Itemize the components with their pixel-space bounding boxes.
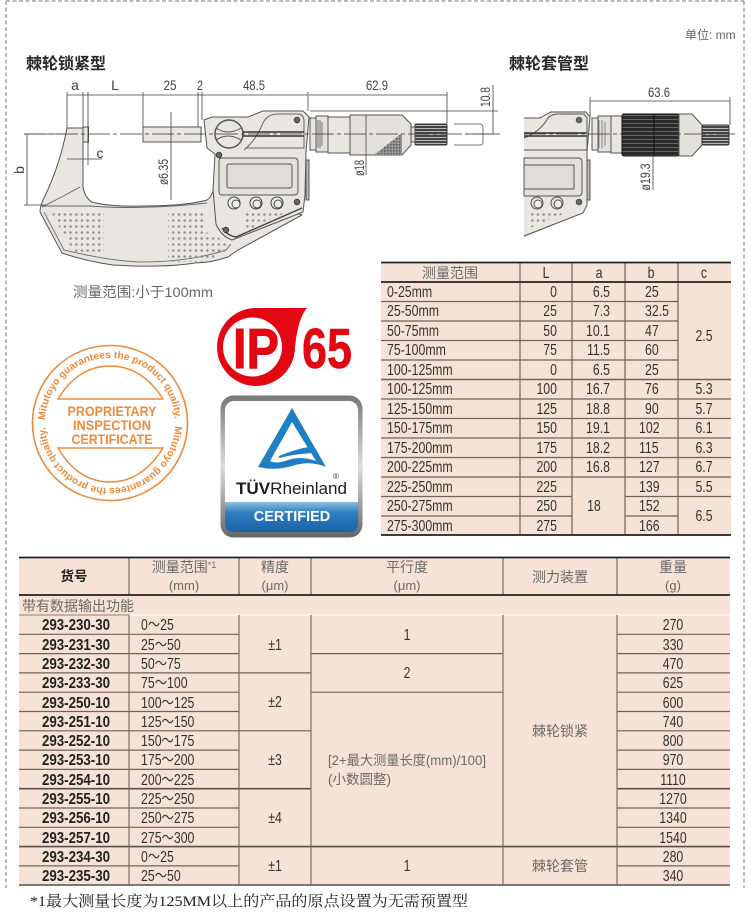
measuring ranges: 75～100 [141,675,188,692]
table header: 测力装置 [532,569,588,585]
weights: 1270 [659,791,687,808]
buttons [228,197,283,209]
parallelism: 1 [404,627,410,644]
weights: 270 [663,617,683,634]
measuring ranges: 150～175 [141,733,194,750]
b column: 25 [645,362,659,379]
a column: 11.5 [587,342,610,359]
range column: 250-275mm [387,498,453,515]
c column: 6.1 [695,420,713,437]
dimensions: ratchet lock: ø6.35 [155,159,171,185]
dot grips [52,213,228,262]
measuring ranges: 200～225 [141,772,194,789]
range column: 50-75mm [387,323,439,340]
a column: 16.8 [586,459,610,476]
b column: 25 [645,284,659,301]
table header: 测量范围 [422,265,478,281]
weights: 625 [663,675,683,692]
dimensions: ratchet lock: 10.8 [477,87,493,107]
dimensions: ratchet sleeve: 63.6 [648,84,670,100]
weights: 340 [663,868,683,885]
measuring ranges: 100～125 [141,695,194,712]
measuring ranges: 275～300 [141,830,194,847]
certificate wording: INSPECTION [73,417,151,433]
measuring ranges: 0～25 [141,849,174,866]
table: dimensions by measuring range [381,262,731,535]
measuring ranges: 0～25 [141,617,174,634]
a column: 18.2 [586,440,610,457]
part numbers: 293-250-10 [42,695,110,712]
weights: 600 [663,695,683,712]
a column: 19.1 [586,420,610,437]
dimensions: ratchet lock: L [111,77,119,93]
dimensions: ratchet lock: 62.9 [366,77,388,93]
force device [532,723,588,874]
side switch [306,160,309,200]
L column: 200 [536,459,557,476]
a column: 6.5 [593,284,610,301]
seal: proprietary inspection certificate [32,344,188,502]
weights: 280 [663,849,683,866]
drawing: ratchet sleeve micrometer [524,111,735,238]
parallelism [328,627,486,875]
part numbers: 293-231-30 [42,637,110,654]
accuracy: ±3 [268,752,282,769]
accuracy: ±4 [268,810,282,827]
spindle [143,127,201,142]
weights: 800 [663,733,683,750]
measuring ranges: 225～250 [141,791,194,808]
a column: 16.7 [586,381,610,398]
b column: 152 [639,498,660,515]
badge: IP65: 65 [302,317,352,381]
part numbers: 293-252-10 [42,733,110,750]
ghost spindle extension [454,124,483,145]
sleeve [592,118,598,150]
c column: 5.3 [695,381,713,398]
table: models and specifications [19,557,730,885]
table header [60,559,687,593]
part numbers: 293-253-10 [42,752,110,769]
b column: 76 [645,381,659,398]
part numbers: 293-257-10 [42,830,110,847]
certificate wording: PROPRIETARY [68,403,157,419]
range column: 125-150mm [387,401,453,418]
measuring ranges: 50～75 [141,656,181,673]
accuracy: ±1 [268,858,282,875]
weights: 1540 [659,830,687,847]
L column: 250 [536,498,557,515]
caption: measuring range under 100mm: 测量范围:小于100mm [73,284,213,300]
a column: 6.5 [593,362,610,379]
dimensions: ratchet lock: c [96,145,104,161]
L column: 225 [536,479,557,496]
accuracy: ±2 [268,694,282,711]
anvil [83,127,88,142]
inner arcs [58,366,163,482]
c column: 2.5 [695,328,713,345]
part numbers: 293-251-10 [42,714,110,731]
L column: 175 [536,440,557,457]
part numbers: 293-254-10 [42,772,110,789]
L column: 150 [536,420,557,437]
range column: 75-100mm [387,342,446,359]
weights: 330 [663,637,683,654]
row lines per column [19,634,730,866]
range column: 225-250mm [387,479,453,496]
part numbers: 293-255-10 [42,791,110,808]
table header: c [701,265,707,282]
dimensions: ratchet lock: 25 [164,77,177,93]
L column: 25 [543,303,557,320]
blue certified band [225,502,358,532]
ratchet [415,124,447,145]
weights: 470 [663,656,683,673]
screws [216,117,300,233]
c column: 5.5 [695,479,713,496]
seal: proprietary inspection certificate: Mitutoyo guarantees the product quality. [40,426,182,495]
accuracy: ±1 [268,637,282,654]
a column: 18 [587,498,601,515]
heading: ratchet lock type: 棘轮锁紧型 [26,54,106,73]
partial display and buttons [524,117,582,209]
L column: 0 [550,284,557,301]
certified text: CERTIFIED [254,509,330,525]
b column: 115 [639,440,659,457]
frame lower bevel [42,187,207,207]
ratchet end [679,114,702,156]
dimensions: ratchet sleeve [590,84,730,190]
knurled black sleeve [622,114,679,156]
b column: 166 [639,518,660,535]
table header: (μm) [394,578,420,593]
center axis [24,133,500,135]
table header [422,265,707,282]
sleeve and thimble [310,115,411,155]
L column: 125 [536,401,557,418]
circular text: Mitutoyo guarantees the product quality. [38,351,180,420]
force device: 棘轮锁紧 [532,723,588,739]
c column [695,328,713,525]
L column: 75 [543,342,557,359]
range column: 100-125mm [387,381,453,398]
dimensions: ratchet sleeve: ø19.3 [637,163,653,190]
badge: IP65: IP [233,317,279,381]
dimensions: ratchet lock: ø18 [351,160,367,176]
c column: 6.7 [695,459,713,476]
b column [639,284,669,535]
L column: 100 [536,381,557,398]
triangle logo [258,408,326,469]
a column: 18.8 [586,401,610,418]
L column: 50 [543,323,557,340]
part numbers: 293-232-30 [42,656,110,673]
parallelism: 2 [404,665,410,682]
range column: 175-200mm [387,440,453,457]
table header: 精度 [261,559,289,575]
c column: 6.3 [695,440,713,457]
parallelism: (小数圆整) [328,772,391,787]
table header: *1 [208,560,216,570]
range column: 25-50mm [387,303,439,320]
weights: 1110 [660,772,686,789]
lock clamp ring [215,120,243,148]
b column: 90 [645,401,659,418]
measuring ranges [141,617,194,885]
dimensions: ratchet lock: a [71,77,79,93]
axis [524,133,735,135]
dimensions: ratchet lock [11,77,498,205]
parallelism: [2+最大测量长度(mm)/100] [328,753,486,768]
range column [387,284,453,535]
unit note: 单位: mm [685,27,736,42]
badge: IP65 [217,308,352,386]
section row: with data output: 带有数据输出功能 [22,598,134,614]
a column [586,284,610,515]
L column [536,284,557,535]
b column: 139 [639,479,660,496]
table header: 平行度 [386,559,428,575]
a column: 10.1 [586,323,610,340]
panel dots [246,211,283,228]
part numbers: 293-235-30 [42,868,110,885]
range column: 0-25mm [387,284,432,301]
part numbers: 293-256-10 [42,810,110,827]
table header: 货号 [60,568,88,584]
measuring ranges: 250～275 [141,810,194,827]
body grooves [244,114,304,150]
b column: 47 [645,323,659,340]
force device: 棘轮套管 [532,858,588,874]
table header: a [596,265,602,282]
part numbers [42,617,110,885]
range column: 200-225mm [387,459,453,476]
range column: 150-175mm [387,420,453,437]
measuring ranges: 175～200 [141,752,194,769]
table header: b [648,265,654,282]
b column: 32.5 [645,303,669,320]
c column: 5.7 [695,401,713,418]
parallelism: 1 [404,858,410,875]
table header: (g) [665,578,681,593]
weights [659,617,687,885]
footnote: *1最大测量长度为125MM以上的产品的原点设置为无需预置型 [30,892,468,910]
measuring ranges: 125～150 [141,714,194,731]
measuring ranges: 25～50 [141,637,181,654]
wordmark: TÜVRheinland [236,479,347,498]
accuracy [268,637,282,875]
part numbers: 293-230-30 [42,617,110,634]
L column: 0 [550,362,557,379]
heading: ratchet sleeve type: 棘轮套管型 [509,54,589,73]
weights: 1340 [659,810,687,827]
table header: L [543,265,549,282]
b column: 102 [639,420,660,437]
range column: 275-300mm [387,518,453,535]
body lower trim [222,208,302,237]
weights: 970 [663,752,683,769]
partial body [524,111,590,238]
table header: (μm) [262,578,288,593]
dimensions: ratchet lock: 48.5 [243,77,265,93]
part numbers: 293-233-30 [42,675,110,692]
display panel [219,158,298,195]
table header: 测量范围 [152,559,208,575]
L column: 275 [536,518,557,535]
C-frame [40,128,302,266]
body [204,111,309,240]
a column: 7.3 [593,303,610,320]
c column: 6.5 [695,508,713,525]
table header: 重量 [659,559,687,575]
drawing: ratchet lock micrometer [24,111,500,266]
certificate wording [68,403,157,447]
dimensions: ratchet lock: 2 [197,77,203,93]
b column: 60 [645,342,659,359]
table header: (mm) [169,578,199,593]
range column: 100-125mm [387,362,453,379]
part numbers: 293-234-30 [42,849,110,866]
dimensions: ratchet lock: b [11,166,27,174]
registered mark: ® [333,472,339,481]
badge: TÜV Rheinland certified [220,396,362,538]
b column: 127 [639,459,660,476]
measuring ranges: 25～50 [141,868,181,885]
certificate wording: CERTIFICATE [72,431,152,447]
weights: 740 [663,714,683,731]
